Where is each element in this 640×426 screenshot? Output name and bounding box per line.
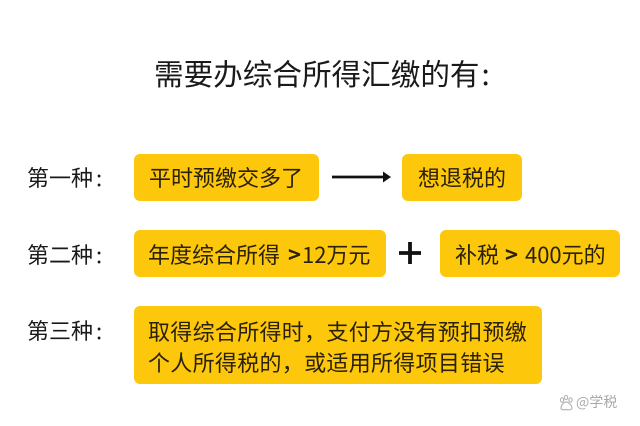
- box: no withholding or wrong item: 取得综合所得时，支付方没有预扣预缴: [148, 315, 527, 347]
- box: overpaid withholding: [134, 154, 319, 201]
- icon: plus: [399, 242, 421, 264]
- box: overpaid withholding: 平时预缴交多了: [149, 161, 303, 193]
- box: tax due over 400: [440, 230, 620, 277]
- watermark: @学税: [576, 392, 617, 412]
- label: type three: 第三种:: [27, 314, 102, 346]
- arrow: leads to refund: [332, 172, 391, 182]
- title: 需要办综合所得汇缴的有:: [154, 51, 490, 94]
- box: annual income over 120k: 年度综合所得 >12万元: [148, 238, 370, 270]
- label: type two: 第二种:: [27, 238, 102, 270]
- box: no withholding or wrong item: 个人所得税的，或适用所得项目错误: [148, 346, 505, 378]
- box: wants refund: 想退税的: [418, 161, 506, 193]
- box: tax due over 400: 补税 > 400元的: [455, 238, 606, 270]
- box: no withholding or wrong item: [134, 306, 542, 384]
- box: wants refund: [402, 154, 522, 201]
- label: type one: 第一种:: [27, 161, 102, 193]
- box: annual income over 120k: [134, 230, 386, 277]
